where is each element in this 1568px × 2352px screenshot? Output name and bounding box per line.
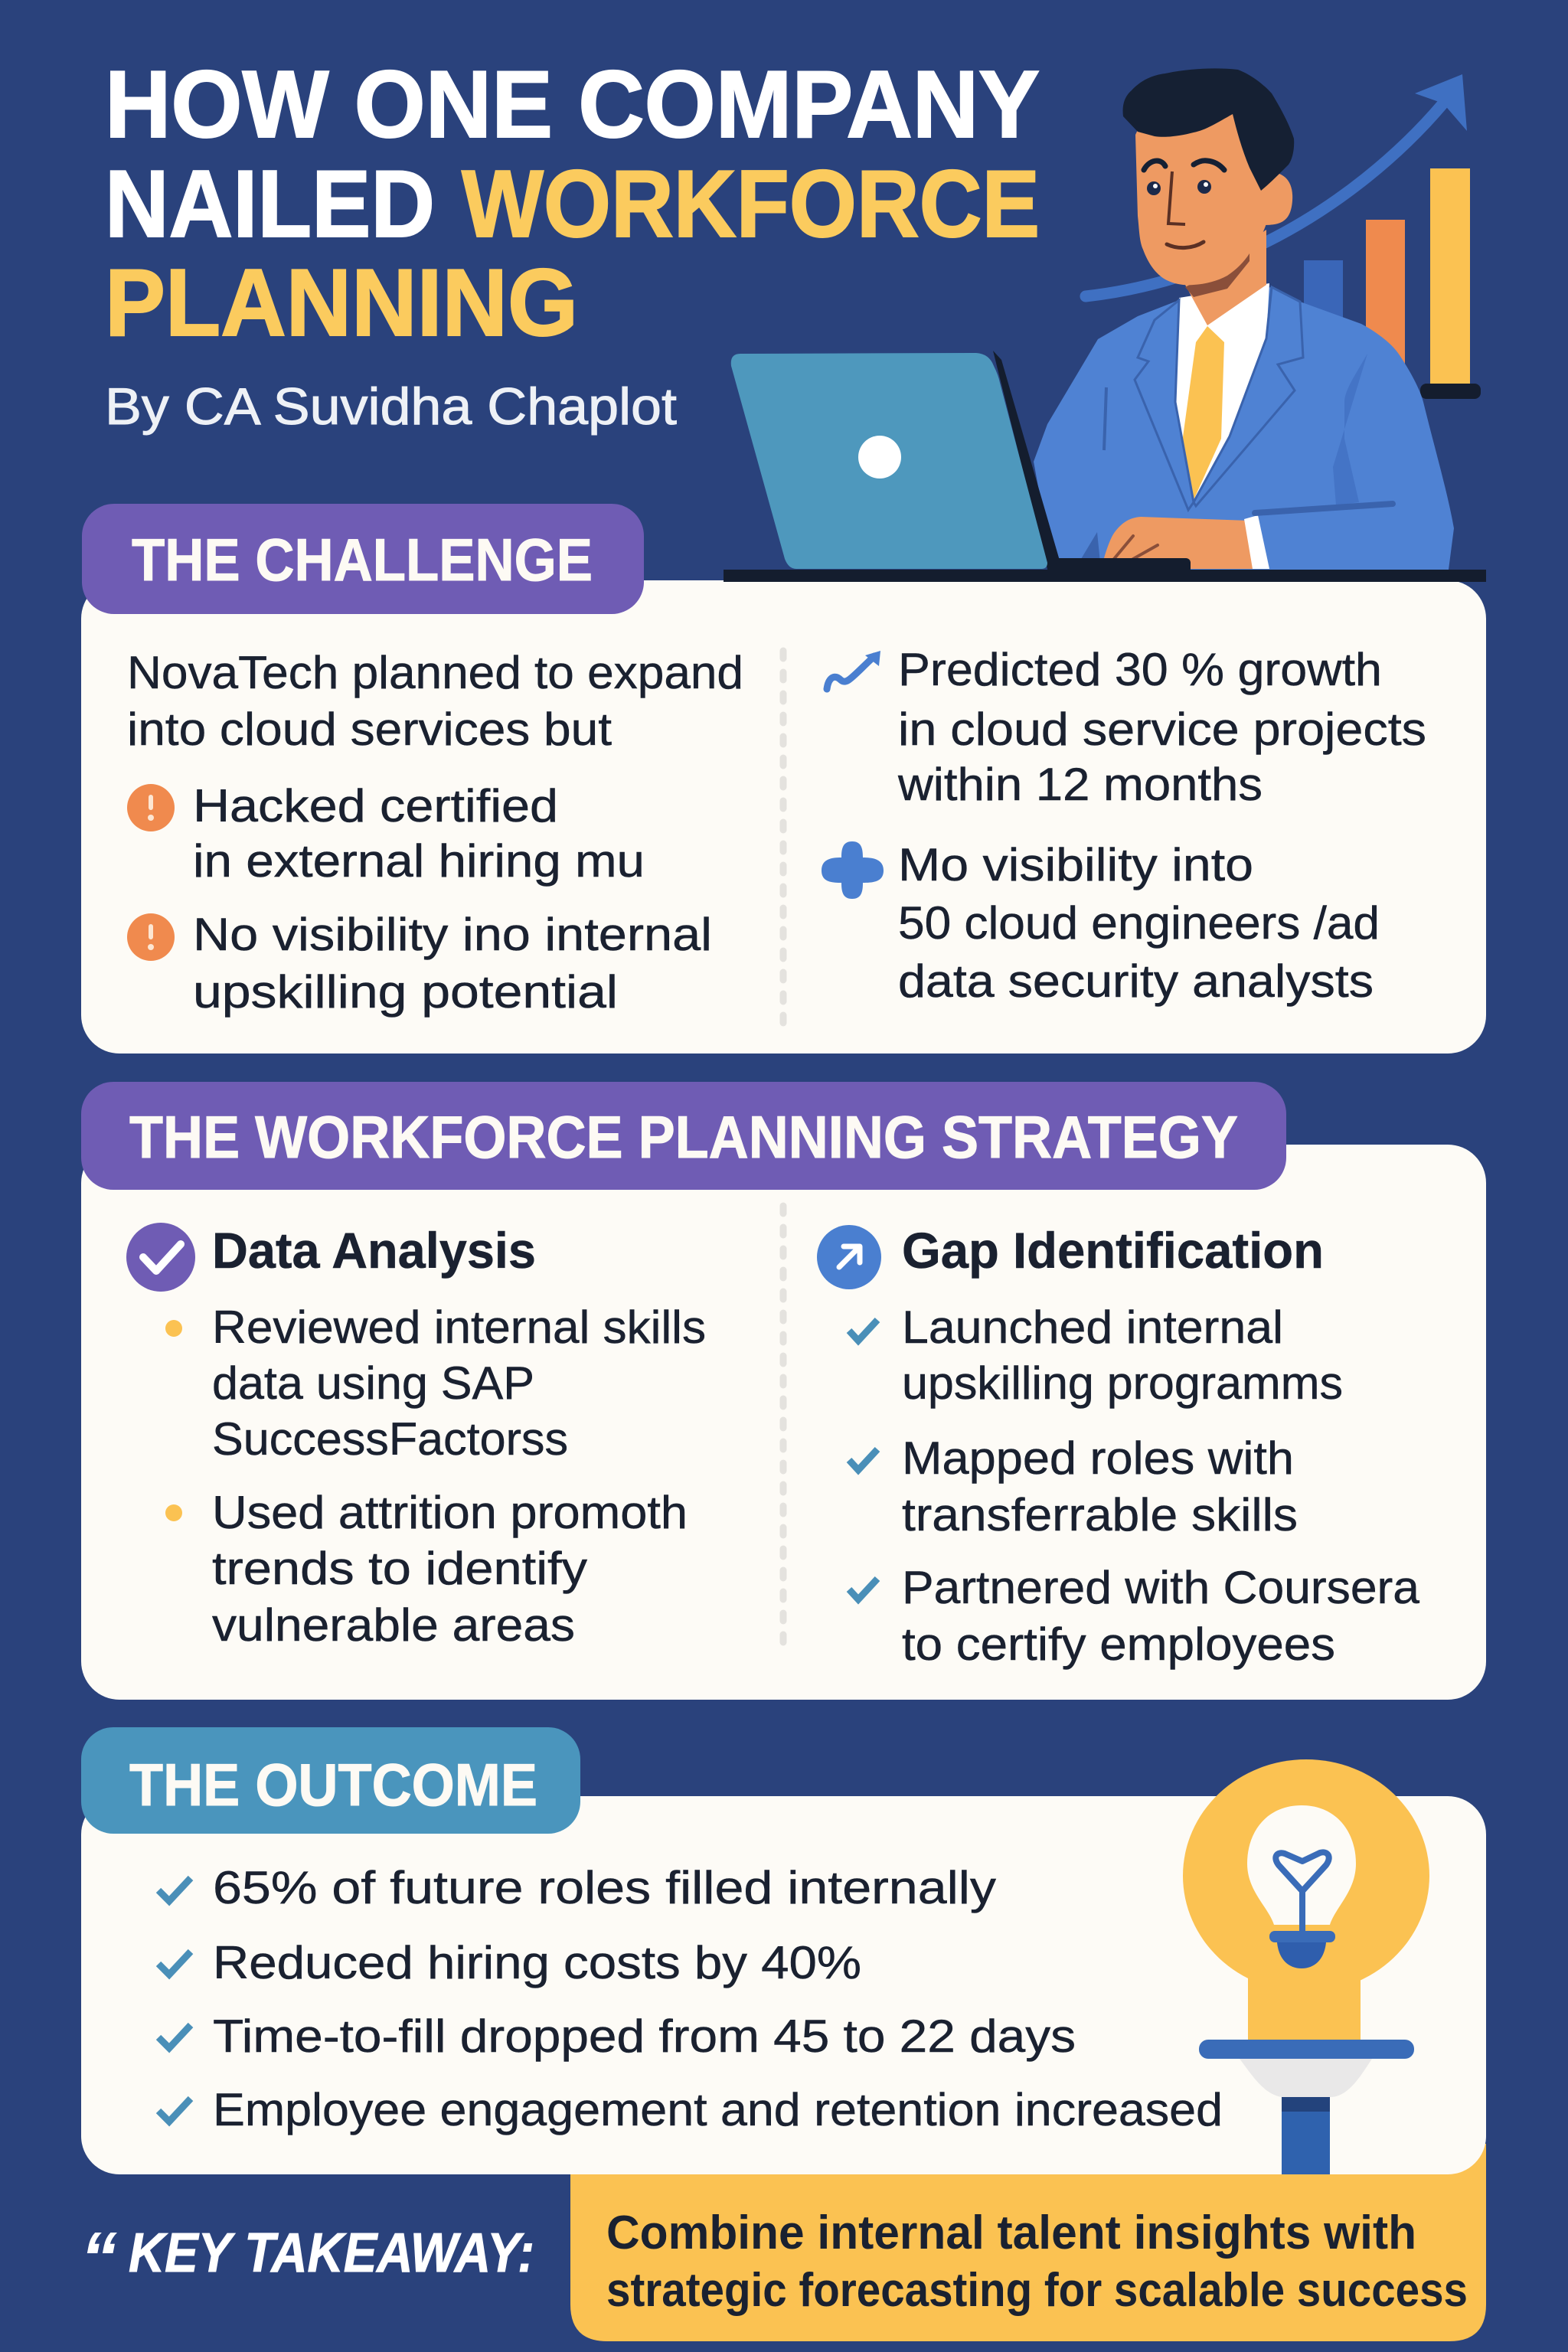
- icon: arrow badge: [817, 1225, 881, 1289]
- right column text: 50 cloud engineers /ad: [898, 897, 1380, 949]
- key takeaway text: [606, 2207, 1468, 2317]
- icon: lightbulb: [1183, 1759, 1429, 2174]
- icon: warning 1: [127, 784, 175, 831]
- gap identification column: [849, 1222, 1420, 1670]
- gap identification column: Mapped roles with: [902, 1432, 1294, 1484]
- outcome list: 65% of future roles filled internally: [213, 1862, 996, 1913]
- tab: outcome: [81, 1727, 580, 1834]
- right column text: data security analysts: [898, 956, 1374, 1007]
- tab: the challenge: [82, 504, 644, 614]
- outcome list: Reduced hiring costs by 40%: [213, 1937, 861, 1988]
- title: [105, 52, 1040, 356]
- left column text: into cloud services but: [127, 704, 612, 755]
- icon: warning 2: [127, 913, 175, 961]
- right column text: in cloud service projects: [898, 704, 1426, 755]
- data analysis column: trends to identify: [212, 1543, 587, 1594]
- outcome list: Time-to-fill dropped from 45 to 22 days: [213, 2011, 1076, 2062]
- right column text: Mo visibility into: [898, 839, 1253, 890]
- right column text: within 12 months: [897, 759, 1263, 810]
- outcome list: Employee engagement and retention increased: [213, 2084, 1223, 2135]
- key takeaway text: strategic forecasting for scalable success: [606, 2264, 1468, 2317]
- data analysis column: SuccessFactorss: [212, 1413, 568, 1465]
- key takeaway label: KEY TAKEAWAY:: [129, 2223, 534, 2284]
- tab: strategy: THE WORKFORCE PLANNING STRATEGY: [129, 1103, 1238, 1171]
- byline: By CA Suvidha Chaplot: [105, 377, 677, 436]
- illustration: growth chart behind the person: [1086, 74, 1481, 399]
- outcome list: [158, 1862, 1223, 2135]
- icon: trend arrow: [827, 651, 880, 689]
- tab: the challenge: THE CHALLENGE: [132, 526, 593, 593]
- right column text: [897, 644, 1426, 1007]
- gap identification column: Launched internal: [902, 1302, 1283, 1353]
- title: NAILED: [105, 152, 435, 257]
- key takeaway label: “: [80, 2217, 117, 2299]
- gap identification column: Partnered with Coursera: [902, 1562, 1420, 1613]
- gap identification column: upskilling programms: [902, 1357, 1343, 1409]
- icon: check badge: [126, 1223, 195, 1292]
- gap identification column: Gap Identification: [902, 1222, 1324, 1279]
- data analysis column: data using SAP: [212, 1357, 534, 1409]
- left column text: [127, 647, 743, 1018]
- title: WORKFORCE: [462, 152, 1040, 257]
- data analysis column: Data Analysis: [212, 1222, 536, 1279]
- left column text: NovaTech planned to expand: [127, 647, 743, 698]
- gap identification column: to certify employees: [902, 1619, 1335, 1670]
- left column text: Hacked certified: [193, 780, 558, 831]
- tab: strategy: [81, 1082, 1286, 1190]
- left column text: in external hiring mu: [193, 835, 645, 887]
- data analysis column: [165, 1222, 706, 1651]
- key takeaway label: [80, 2217, 534, 2299]
- panel: the outcome: [81, 1727, 1486, 2174]
- key takeaway text: Combine internal talent insights with: [606, 2207, 1416, 2259]
- title: HOW ONE COMPANY: [105, 52, 1040, 158]
- panel: the challenge: [81, 504, 1486, 1054]
- tab: outcome: THE OUTCOME: [129, 1751, 537, 1818]
- callout box: key takeaway background: [570, 2144, 1486, 2341]
- panel: workforce planning strategy: [81, 1082, 1486, 1700]
- data analysis column: vulnerable areas: [212, 1599, 575, 1651]
- icon: plus: [822, 841, 884, 899]
- left column text: No visibility ino internal: [193, 909, 712, 960]
- left column text: upskilling potential: [193, 966, 618, 1018]
- illustration: businessman at laptop: [724, 68, 1486, 582]
- right column text: Predicted 30 % growth: [898, 644, 1382, 695]
- gap identification column: transferrable skills: [902, 1489, 1298, 1540]
- data analysis column: Reviewed internal skills: [212, 1302, 706, 1353]
- title: PLANNING: [105, 250, 578, 356]
- data analysis column: Used attrition promoth: [212, 1487, 688, 1538]
